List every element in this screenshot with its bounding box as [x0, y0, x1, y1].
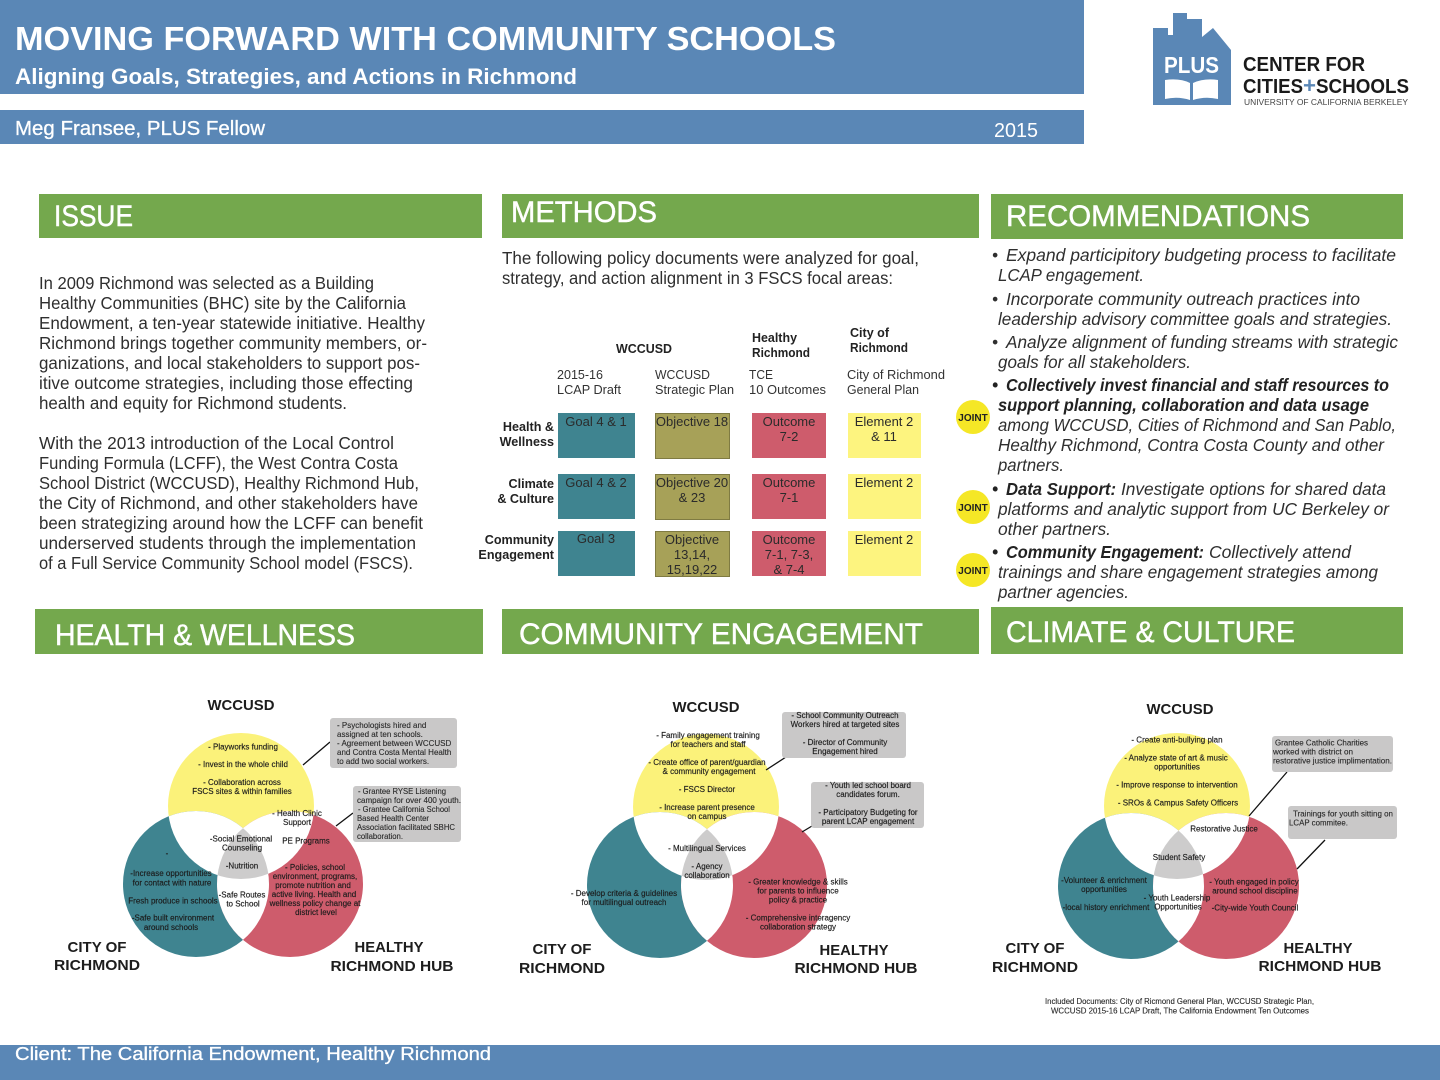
venn diagram: health and wellness: - Invest in the whole child — [198, 760, 288, 769]
callout: grantee activities: - Grantee California School — [358, 805, 450, 814]
text block: recommendations list: Expand participitory budgeting process to facilitate — [1006, 245, 1396, 265]
venn diagram: climate and culture: Opportunities — [1154, 902, 1202, 912]
callout: outreach workers and director: Engagement hired — [812, 747, 878, 756]
venn diagram: health and wellness: Support — [283, 818, 312, 827]
year: 2015 — [994, 120, 1038, 142]
venn label: City of Richmond — [992, 940, 1078, 976]
venn diagram: community engagement: - Develop criteria & guidelines — [571, 889, 677, 898]
table row labels: Health & — [503, 420, 554, 434]
venn diagram: health and wellness: PE Programs — [282, 836, 330, 846]
heading: health and wellness: HEALTH & WELLNESS — [55, 619, 355, 652]
callout: LCAP youth training: LCAP commitee. — [1289, 818, 1348, 828]
venn label: Healthy Richmond Hub: HEALTHY — [354, 939, 424, 956]
venn diagram: community engagement: - Family engagement training — [656, 731, 760, 740]
text block: recommendations list: Investigate options for shared data — [1121, 479, 1386, 499]
heading: climate and culture: CLIMATE & CULTURE — [1006, 616, 1295, 649]
panel: recommendations — [956, 194, 1403, 602]
text block: methods intro: strategy, and action alignment in 3 FSCS focal areas: — [502, 268, 893, 288]
callout: psychologists and social workers: - Agreement between WCCUSD — [337, 739, 451, 748]
text block: included documents note: Included Documents: City of Ricmond General Plan, WCCUSD Strategic Plan, — [1045, 997, 1314, 1006]
venn label: Healthy Richmond Hub: RICHMOND HUB — [1258, 958, 1382, 975]
callout: grantee activities: Based Health Center — [357, 814, 429, 823]
panel: climate and culture — [991, 607, 1403, 1016]
venn diagram: community engagement — [519, 699, 918, 977]
table row labels: Wellness — [500, 435, 554, 449]
heading: recommendations — [991, 194, 1403, 239]
heading: recommendations: RECOMMENDATIONS — [1006, 200, 1310, 233]
venn diagram: health and wellness: to School — [226, 900, 260, 908]
text block: recommendations list: trainings and share engagement strategies among — [998, 562, 1378, 582]
panel: community engagement — [502, 609, 979, 977]
venn diagram: climate and culture: - Improve response to intervention — [1116, 780, 1238, 790]
text block: recommendations list: • — [992, 289, 998, 309]
venn diagram: climate and culture: - Create anti-bullying plan — [1131, 736, 1223, 744]
joint badge: collective investment: JOINT — [958, 413, 988, 424]
text block: recommendations list: Community Engagement: — [1006, 542, 1204, 562]
venn label: City of Richmond — [54, 939, 140, 974]
table column headers: City of — [850, 326, 890, 340]
text block: recommendations list: Healthy Richmond, Contra Costa County and other — [998, 435, 1385, 455]
text block: recommendations list: goals for all stakeholders. — [998, 352, 1191, 372]
table column headers: City of Richmond — [847, 367, 945, 382]
text block: recommendations list: partners. — [997, 455, 1064, 475]
table column headers: 2015-16 — [557, 367, 603, 382]
venn diagram: health and wellness: active living. Health and — [272, 890, 356, 899]
venn label: WCCUSD: WCCUSD — [672, 699, 740, 716]
venn diagram: climate and culture: - Youth engaged in policy — [1209, 878, 1299, 886]
venn diagram: health and wellness: wellness policy change at — [269, 899, 361, 908]
venn diagram: health and wellness: FSCS sites & within families — [192, 787, 292, 796]
venn diagram: health and wellness: -Safe built environment — [132, 914, 215, 922]
venn label: Healthy Richmond Hub: HEALTHY — [1284, 940, 1352, 957]
table row labels: Engagement — [478, 548, 555, 562]
table cells: Outcome — [763, 475, 815, 490]
text block: issue paragraphs: In 2009 Richmond was selected as a Building — [39, 273, 374, 293]
text block: recommendations list: platforms and analytic support from UC Berkeley or — [997, 499, 1390, 519]
callout: grantee activities: campaign for over 400 youth. — [357, 796, 461, 805]
text block: issue paragraphs: ganizations, and local stakeholders to support pos- — [39, 353, 420, 373]
text block: recommendations list: • — [992, 542, 998, 562]
callout: psychologists and social workers — [303, 718, 457, 768]
table cells: Outcome — [763, 414, 815, 429]
callout: LCAP youth training — [1288, 806, 1397, 869]
venn label: Healthy Richmond Hub: RICHMOND HUB — [330, 958, 454, 975]
venn diagram: climate and culture: Restorative Justice — [1190, 824, 1258, 834]
title: MOVING FORWARD WITH COMMUNITY SCHOOLS — [15, 20, 836, 57]
heading: issue: ISSUE — [54, 200, 133, 233]
callout: grantee activities: - Grantee RYSE Listening — [358, 787, 446, 796]
text block: issue paragraphs — [39, 273, 427, 573]
table cells: & 7-4 — [773, 562, 805, 577]
table cells: 13,14, — [674, 547, 710, 562]
text block: issue paragraphs: health and equity for Richmond students. — [39, 393, 347, 413]
text block: recommendations list: support planning, collaboration and data usage — [998, 395, 1369, 415]
venn diagram: health and wellness: -Increase opportunities — [130, 869, 212, 878]
callout: outreach workers and director: - Director of Community — [803, 738, 887, 747]
table column headers: TCE — [749, 367, 773, 382]
callout: grantee activities: Association facilitated SBHC — [357, 823, 455, 832]
table cells: 7-1 — [780, 490, 798, 505]
callout: psychologists and social workers: and Contra Costa Mental Health — [337, 748, 451, 757]
venn diagram: community engagement: - Agency — [691, 862, 723, 871]
venn diagram: health and wellness: - Policies, school — [285, 863, 345, 872]
text block: recommendations list: Collectively invest financial and staff resources to — [1006, 375, 1389, 395]
venn label: Healthy Richmond Hub — [794, 942, 918, 977]
table column headers: 10 Outcomes — [749, 382, 826, 397]
table column headers: Healthy — [752, 331, 797, 345]
table column headers: Strategic Plan — [655, 382, 734, 397]
callout: psychologists and social workers: assigned at ten schools. — [337, 730, 423, 739]
table cells: Element 2 — [855, 475, 913, 490]
author name: Meg Fransee, PLUS Fellow — [15, 117, 265, 140]
venn diagram: health and wellness: -Social Emotional — [210, 834, 272, 844]
venn diagram: climate and culture: opportunities — [1154, 762, 1200, 772]
venn diagram: community engagement: - Comprehensive interagency — [746, 914, 850, 922]
table cells: & 11 — [871, 429, 897, 444]
heading: community engagement: COMMUNITY ENGAGEMENT — [519, 618, 923, 651]
callout: youth forum and participatory budgeting: - Youth led school board — [825, 781, 911, 790]
joint badge: data support: JOINT — [958, 503, 988, 514]
joint badge: community engagement — [956, 553, 990, 587]
panel: issue — [39, 194, 482, 573]
table row labels: & Culture — [497, 492, 554, 506]
venn diagram: health and wellness: for contact with nature — [133, 878, 212, 888]
venn diagram: community engagement: for teachers and staff — [670, 740, 746, 749]
venn label: City of Richmond: CITY OF — [532, 941, 592, 958]
venn diagram: community engagement: collaboration — [684, 871, 730, 880]
table cells — [558, 413, 921, 577]
callout: youth forum and participatory budgeting: candidates forum. — [836, 790, 900, 799]
text block: recommendations list: LCAP engagement. — [998, 265, 1144, 285]
table cells: Goal 4 & 2 — [565, 475, 627, 490]
icon: house with book: PLUS — [1164, 52, 1219, 78]
header: title banner — [0, 0, 1084, 94]
text block: recommendations list: • — [992, 332, 998, 352]
callout: psychologists and social workers: to add two social workers. — [337, 757, 429, 766]
logo wordmark — [1243, 54, 1409, 107]
logo wordmark: UNIVERSITY OF CALIFORNIA BERKELEY — [1244, 98, 1409, 107]
callout: outreach workers and director: Workers hired at targeted sites — [791, 720, 899, 729]
venn diagram: climate and culture: Student Safety — [1153, 853, 1205, 862]
text block: issue paragraphs: been strategizing around how the LCFF can benefit — [39, 513, 423, 533]
text block: recommendations list: • — [992, 479, 998, 499]
text block: recommendations list: partner agencies. — [997, 582, 1129, 602]
venn diagram: climate and culture: -City-wide Youth Council — [1212, 904, 1299, 912]
alignment table — [478, 326, 945, 577]
venn diagram: community engagement: & community engagement — [663, 767, 756, 776]
venn diagram: climate and culture: - Analyze state of art & music — [1124, 754, 1228, 762]
venn diagram: climate and culture: opportunities — [1081, 885, 1127, 894]
table cells: Outcome — [763, 532, 815, 547]
venn label: Healthy Richmond Hub — [1258, 940, 1382, 975]
venn diagram: climate and culture: -Volunteer & enrichment — [1061, 876, 1148, 885]
venn diagram: community engagement: collaboration strategy — [760, 922, 836, 932]
venn diagram: community engagement: policy & practice — [769, 896, 828, 904]
logo wordmark: CITIES — [1243, 76, 1303, 98]
table cells: Element 2 — [855, 414, 913, 429]
panel: health and wellness — [35, 609, 483, 975]
venn diagram: health and wellness: around schools — [144, 923, 198, 932]
callout: restorative justice grantee: worked with district on — [1272, 748, 1353, 756]
table column headers: Richmond — [850, 341, 908, 355]
venn label: City of Richmond: RICHMOND — [519, 960, 605, 977]
text block: issue paragraphs: School District (WCCUSD), Healthy Richmond Hub, — [39, 473, 419, 493]
venn diagram: health and wellness — [54, 697, 454, 975]
text block: issue paragraphs: Endowment, a ten-year statewide initiative. Healthy — [39, 313, 425, 333]
venn label: City of Richmond: RICHMOND — [992, 959, 1078, 976]
callout: LCAP youth training: Trainings for youth sitting on — [1293, 810, 1393, 818]
venn diagram: health and wellness: promote nutrition and — [275, 881, 351, 890]
joint badge: community engagement: JOINT — [958, 566, 988, 577]
text block: issue paragraphs: Healthy Communities (BHC) site by the California — [39, 293, 406, 313]
author bar — [0, 110, 1084, 144]
callout: restorative justice grantee: restorative justice implimentation. — [1273, 756, 1392, 766]
venn label: Healthy Richmond Hub: RICHMOND HUB — [794, 960, 918, 977]
text block: recommendations list: leadership advisory committee goals and strategies. — [998, 309, 1392, 329]
table row labels: Climate — [508, 477, 554, 491]
venn label: City of Richmond: RICHMOND — [54, 957, 140, 974]
venn diagram: health and wellness: Fresh produce in schools — [128, 896, 218, 906]
footer bar — [0, 1044, 1440, 1080]
text block: recommendations list — [992, 245, 1398, 602]
table cells: Goal 3 — [577, 531, 615, 546]
text block: recommendations list: • — [992, 245, 998, 265]
venn label: WCCUSD: WCCUSD — [208, 697, 275, 714]
text block: included documents note: WCCUSD 2015-16 LCAP Draft, The California Endowment Ten Outcomes — [1051, 1006, 1309, 1016]
heading: methods: METHODS — [511, 196, 657, 229]
venn diagram: health and wellness: - — [166, 849, 169, 858]
callout: outreach workers and director — [766, 711, 906, 770]
logo wordmark: CENTER FOR — [1243, 54, 1366, 76]
venn diagram: health and wellness: - Collaboration across — [203, 778, 281, 787]
text block: methods intro: The following policy documents were analyzed for goal, — [502, 248, 919, 268]
table row labels — [478, 420, 555, 562]
venn diagram: climate and culture: - Youth Leadership — [1144, 894, 1211, 902]
venn diagram: community engagement: on campus — [687, 812, 727, 821]
text block: issue paragraphs: underserved students through the implementation — [39, 533, 416, 553]
table cells: 7-1, 7-3, — [765, 547, 813, 562]
venn diagram: health and wellness: - Playworks funding — [208, 742, 278, 752]
venn label: City of Richmond: CITY OF — [1006, 940, 1064, 957]
callout: youth forum and participatory budgeting — [802, 781, 924, 832]
logo wordmark: + — [1303, 73, 1316, 98]
table cells: & 23 — [679, 490, 705, 505]
table cells: 15,19,22 — [667, 562, 717, 577]
panel: methods — [478, 194, 979, 577]
venn diagram: health and wellness: district level — [295, 908, 337, 917]
venn label: Healthy Richmond Hub — [330, 939, 454, 975]
callout: psychologists and social workers: - Psychologists hired and — [337, 721, 426, 730]
text block: recommendations list: Collectively attend — [1209, 542, 1352, 562]
text block: issue paragraphs: Funding Formula (LCFF), the West Contra Costa — [39, 453, 398, 473]
venn diagram: climate and culture — [992, 701, 1382, 976]
venn diagram: health and wellness: -Nutrition — [226, 862, 258, 870]
text block: recommendations list: Incorporate community outreach practices into — [1006, 289, 1360, 309]
heading: community engagement — [502, 609, 979, 654]
callout: grantee activities: collaboration. — [357, 832, 403, 841]
venn label: Healthy Richmond Hub: HEALTHY — [820, 942, 888, 959]
heading: issue — [39, 194, 482, 238]
table column headers: WCCUSD — [655, 367, 710, 382]
logo: PLUS Center for Cities + Schools — [1153, 13, 1409, 107]
venn diagram: community engagement: - FSCS Director — [679, 785, 736, 794]
venn diagram: health and wellness: Counseling — [222, 844, 262, 852]
joint badge: data support — [956, 490, 990, 524]
logo wordmark: SCHOOLS — [1316, 76, 1409, 98]
text block: issue paragraphs: of a Full Service Community School model (FSCS). — [39, 553, 413, 573]
joint badge: collective investment — [956, 400, 990, 434]
table cells: Objective 18 — [656, 414, 728, 429]
table column headers — [557, 326, 945, 397]
callout: youth forum and participatory budgeting: - Participatory Budgeting for — [818, 808, 918, 817]
text block: issue paragraphs: With the 2013 introduction of the Local Control — [39, 433, 394, 453]
table cells: Element 2 — [855, 532, 913, 547]
text block: methods intro — [502, 248, 919, 288]
venn diagram: climate and culture: -local history enrichment — [1063, 903, 1150, 912]
venn diagram: climate and culture: around school discipline — [1212, 886, 1298, 896]
table row labels: Community — [485, 533, 554, 547]
subtitle: Aligning Goals, Strategies, and Actions in Richmond — [15, 64, 577, 89]
venn diagram: health and wellness: - Health Clinic — [272, 809, 322, 818]
text block: issue paragraphs: the City of Richmond, and other stakeholders have — [39, 493, 418, 513]
venn diagram: community engagement: - Multilingual Services — [668, 844, 746, 853]
client line: Client: The California Endowment, Healthy Richmond — [15, 1044, 491, 1064]
text block: included documents note — [1045, 997, 1314, 1016]
text block: recommendations list: Data Support: — [1006, 479, 1116, 499]
table column headers: General Plan — [847, 382, 919, 397]
venn diagram: community engagement: for multilingual outreach — [582, 898, 666, 907]
table column headers: Richmond — [752, 346, 810, 360]
venn label: City of Richmond: CITY OF — [68, 939, 126, 956]
table cells: Objective 20 — [656, 475, 728, 490]
venn label: City of Richmond — [519, 941, 605, 977]
text block: recommendations list: among WCCUSD, Cities of Richmond and San Pablo, — [998, 415, 1396, 435]
callout: grantee activities — [336, 786, 461, 842]
table column headers: WCCUSD — [616, 342, 672, 356]
text block: recommendations list: Analyze alignment of funding streams with strategic — [1005, 332, 1398, 352]
callout: outreach workers and director: - School Community Outreach — [791, 711, 899, 720]
table column headers: LCAP Draft — [557, 382, 621, 397]
venn diagram: climate and culture: - SROs & Campus Safety Officers — [1118, 798, 1238, 808]
venn label: WCCUSD: WCCUSD — [1146, 701, 1214, 718]
venn diagram: community engagement: - Increase parent presence — [659, 803, 755, 812]
icon: house with book — [1153, 13, 1231, 105]
venn diagram: health and wellness: environment, programs, — [273, 872, 357, 881]
venn diagram: health and wellness: -Safe Routes — [219, 890, 265, 900]
table cells: 7-2 — [780, 429, 798, 444]
callout: youth forum and participatory budgeting: parent LCAP engagement — [822, 817, 915, 826]
text block: issue paragraphs: itive outcome strategies, including those effecting — [39, 373, 413, 393]
table cells: Goal 4 & 1 — [565, 414, 627, 429]
callout: restorative justice grantee: Grantee Catholic Charities — [1275, 738, 1368, 748]
venn diagram: community engagement: for parents to influence — [757, 886, 839, 896]
table cells: Objective — [665, 532, 719, 547]
heading: climate and culture — [991, 607, 1403, 654]
heading: health and wellness — [35, 609, 483, 654]
venn diagram: community engagement: - Create office of parent/guardian — [648, 758, 766, 767]
text block: recommendations list: other partners. — [998, 519, 1111, 539]
heading: methods — [502, 194, 979, 238]
text block: recommendations list: • — [992, 375, 998, 395]
callout: restorative justice grantee — [1249, 736, 1393, 816]
venn diagram: community engagement: - Greater knowledge & skills — [748, 878, 848, 886]
text block: issue paragraphs: Richmond brings together community members, or- — [39, 333, 427, 353]
